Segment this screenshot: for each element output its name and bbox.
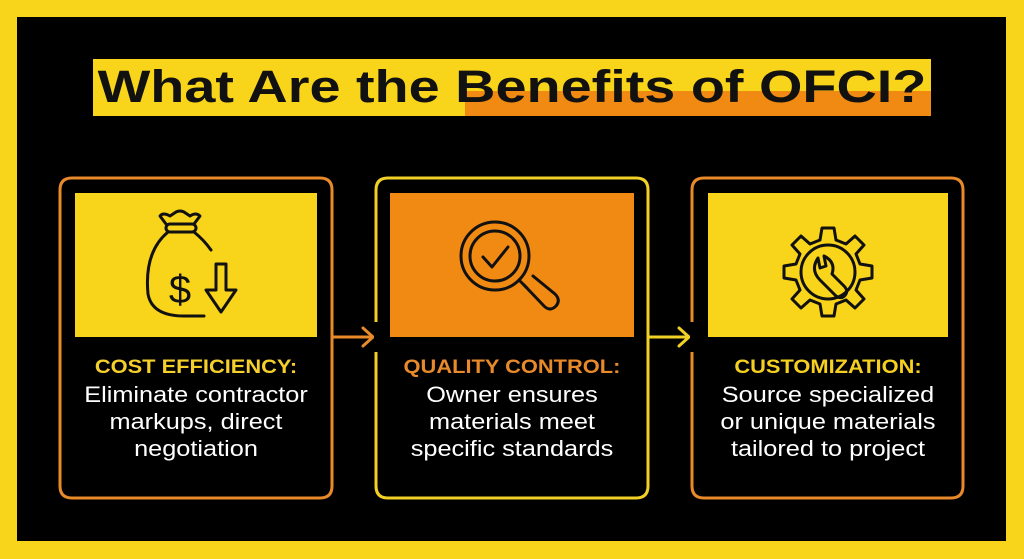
text: cost efficiency: negotiation (134, 436, 258, 461)
title: What Are the Benefits of OFCI? (98, 61, 926, 112)
icon: magnifier with check (461, 222, 558, 309)
arrow: card 2 to card 3 (648, 328, 689, 346)
text: customization: Source specialized (722, 382, 934, 407)
text: quality control (404, 357, 620, 461)
icon: gear with wrench (784, 228, 872, 316)
text: cost efficiency: Eliminate contractor (84, 382, 308, 407)
panel: quality control card (374, 178, 648, 498)
panel: customization card (690, 178, 963, 498)
text: customization: or unique materials (720, 409, 936, 434)
text: cost efficiency (84, 357, 308, 461)
text: customization: tailored to project (731, 436, 925, 461)
text: quality control: Owner ensures (426, 382, 598, 407)
text: quality control: materials meet (429, 409, 595, 434)
text: quality control: specific standards (411, 436, 613, 461)
text: customization: CUSTOMIZATION: (734, 357, 922, 378)
icon: money bag with down arrow (147, 211, 236, 316)
icon: money bag with down arrow: $ (169, 268, 191, 312)
text: cost efficiency: markups, direct (110, 409, 282, 434)
text: cost efficiency: COST EFFICIENCY: (95, 357, 297, 378)
panel: cost efficiency card (60, 178, 332, 498)
title highlight bars (93, 59, 931, 116)
text: quality control: QUALITY CONTROL: (404, 357, 620, 378)
text: customization (720, 357, 936, 461)
arrow: card 1 to card 2 (332, 328, 373, 346)
